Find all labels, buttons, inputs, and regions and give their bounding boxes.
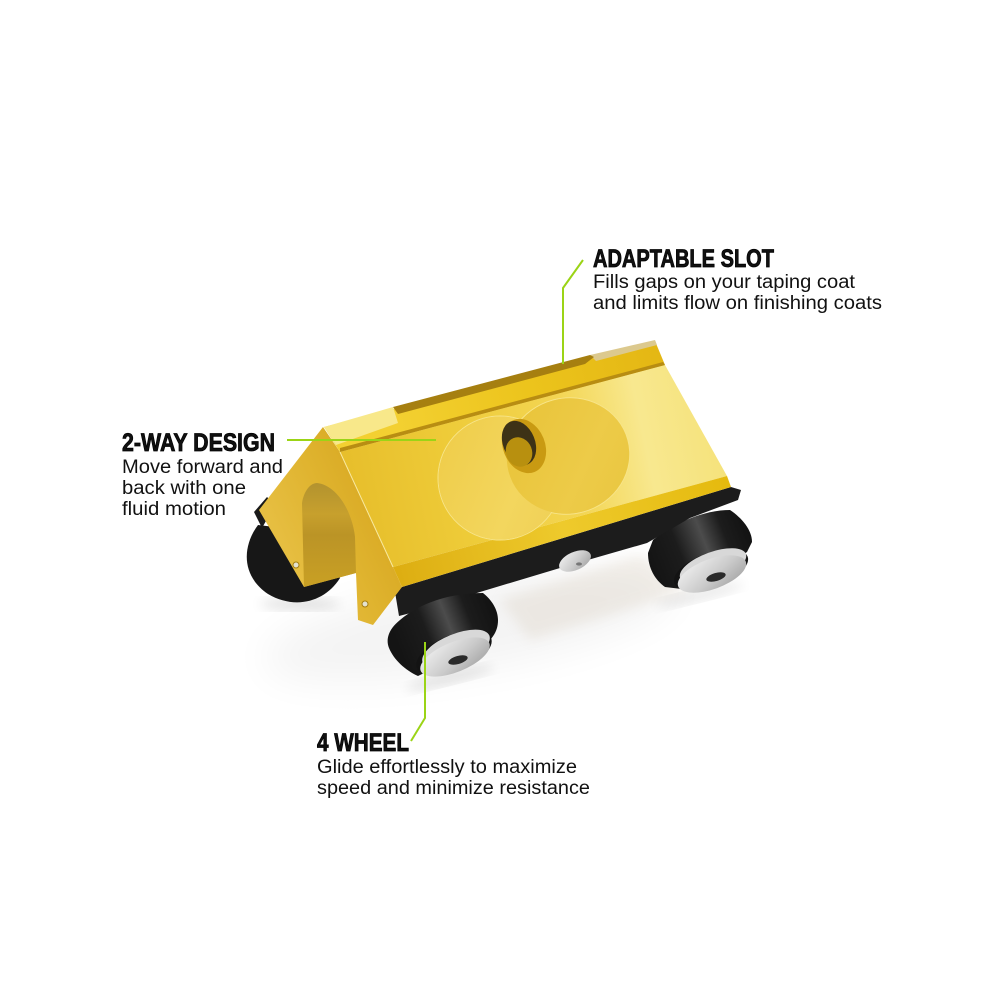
heading: 4 WHEEL: [317, 729, 409, 757]
description: Fills gaps on your taping coat: [593, 272, 856, 293]
heading: ADAPTABLE SLOT: [593, 245, 774, 273]
description: Glide effortlessly to maximize: [317, 757, 577, 778]
description: back with one: [122, 478, 246, 499]
top strip: [324, 341, 665, 452]
left recessed disc: [425, 403, 575, 553]
leader line: [411, 642, 425, 741]
light chamfer, right: [590, 340, 657, 361]
edge highlight: [340, 452, 393, 567]
description: speed and minimize resistance: [317, 778, 590, 799]
groove line: [340, 362, 665, 452]
adaptable slot: [393, 355, 594, 414]
icon: front wheel: [388, 593, 498, 685]
description: Move forward and: [122, 457, 283, 478]
main angled face: [340, 365, 727, 567]
description: and limits flow on finishing coats: [593, 293, 882, 314]
pin holes: [293, 562, 368, 607]
icon: centre bolt: [556, 546, 594, 576]
light chamfer, left: [324, 407, 398, 445]
leader line: [563, 260, 583, 364]
description: fluid motion: [122, 499, 226, 520]
icon: right wheel: [648, 510, 753, 600]
ground shadow: [255, 544, 745, 706]
product: gold carriage with wheels: [247, 340, 753, 685]
callout: adaptable slot: [563, 245, 882, 364]
right recessed disc: [494, 385, 642, 527]
black base plate: [395, 487, 741, 616]
callout: 2-way design: [122, 429, 436, 520]
heading: 2-WAY DESIGN: [122, 429, 275, 457]
arch inner surface: [302, 483, 356, 587]
callout: 4 wheel: [317, 642, 590, 799]
end face with arch cut-out: [259, 427, 402, 625]
leader line: [287, 439, 436, 441]
disc outlines: [424, 384, 643, 554]
centre hole: [494, 412, 554, 480]
lower gold strip: [393, 476, 731, 587]
icon: rear left wheel: [247, 497, 340, 602]
